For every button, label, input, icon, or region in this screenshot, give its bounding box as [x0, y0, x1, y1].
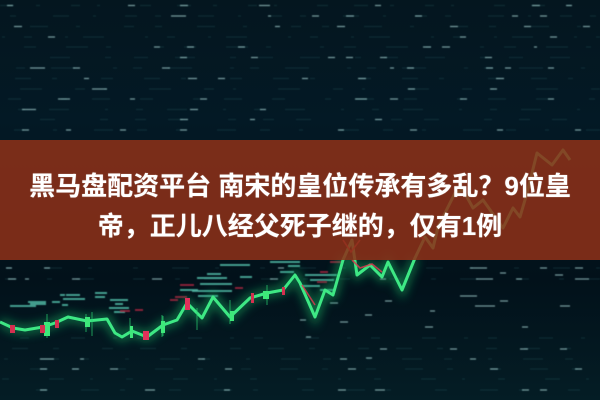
glow under price line	[0, 258, 415, 337]
title	[29, 171, 571, 241]
red labels near the price line	[120, 262, 342, 311]
title band	[0, 140, 600, 260]
title line 1: 黑马盘配资平台 南宋的皇位传承有多乱？9位皇	[29, 171, 571, 201]
title line 2: 帝，正儿八经父死子继的，仅有1例	[98, 211, 502, 241]
price line	[0, 150, 570, 337]
red trace alongside the price line	[302, 232, 425, 305]
candlesticks	[10, 285, 285, 340]
cyan labels above the price line	[10, 262, 337, 312]
